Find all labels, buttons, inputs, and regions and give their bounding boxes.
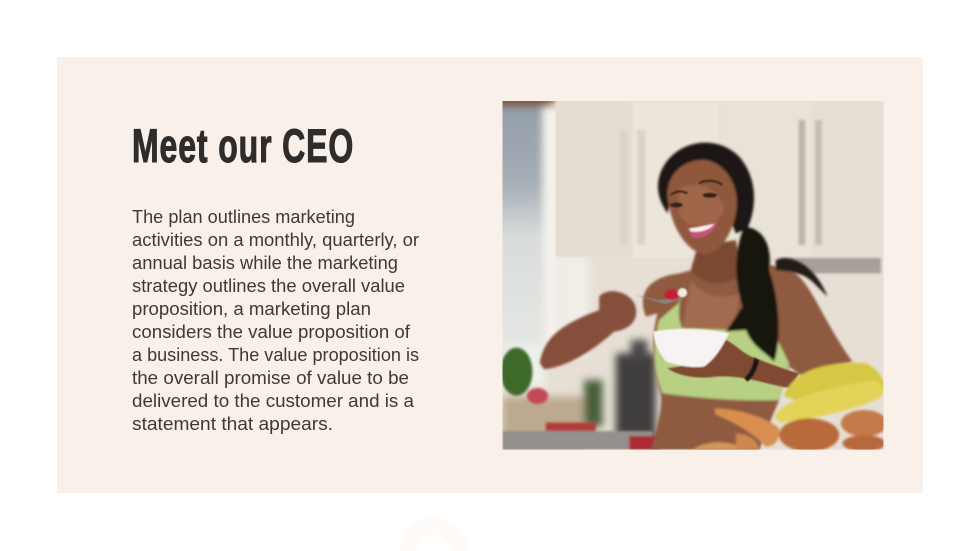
panel: CEO card background xyxy=(57,57,923,493)
text block: CEO description: proposition, a marketing plan xyxy=(132,299,371,319)
window and wall xyxy=(502,101,590,388)
heading: Meet our CEO: Meet our CEO xyxy=(132,119,354,173)
neck xyxy=(691,240,742,283)
text block: CEO description: the overall promise of value to be xyxy=(132,368,409,388)
arm holding spoon xyxy=(540,291,636,369)
background counter clutter xyxy=(502,340,656,450)
spoon with strawberry xyxy=(634,295,682,304)
smile xyxy=(686,222,717,238)
bowl xyxy=(653,329,729,367)
faint decorative arc at bottom xyxy=(400,517,468,551)
bananas and sweet potatoes xyxy=(692,363,887,452)
forearm and hand holding bowl xyxy=(667,338,799,388)
text block: CEO description: a business. The value proposition is xyxy=(132,345,419,365)
photo: woman eating in a kitchen xyxy=(493,90,887,452)
green top xyxy=(652,296,791,402)
chest highlight xyxy=(682,280,741,330)
text block: CEO description xyxy=(132,207,419,434)
hair back xyxy=(658,143,754,233)
text block: CEO description: delivered to the customer and is a xyxy=(132,391,415,411)
cabinets xyxy=(556,102,886,273)
text block: CEO description: statement that appears. xyxy=(132,414,333,434)
text block: CEO description: The plan outlines marketing xyxy=(132,207,355,227)
wristband xyxy=(744,357,759,382)
text block: CEO description: strategy outlines the overall value xyxy=(132,276,405,296)
torso and shoulders xyxy=(643,257,852,450)
woman xyxy=(540,143,852,450)
text block: CEO description: considers the value proposition of xyxy=(132,322,411,342)
text block: CEO description: annual basis while the marketing xyxy=(132,253,398,273)
eyes xyxy=(670,203,683,207)
face xyxy=(667,160,737,254)
hair braid xyxy=(726,227,779,362)
text block: CEO description: activities on a monthly, quarterly, or xyxy=(132,230,419,250)
